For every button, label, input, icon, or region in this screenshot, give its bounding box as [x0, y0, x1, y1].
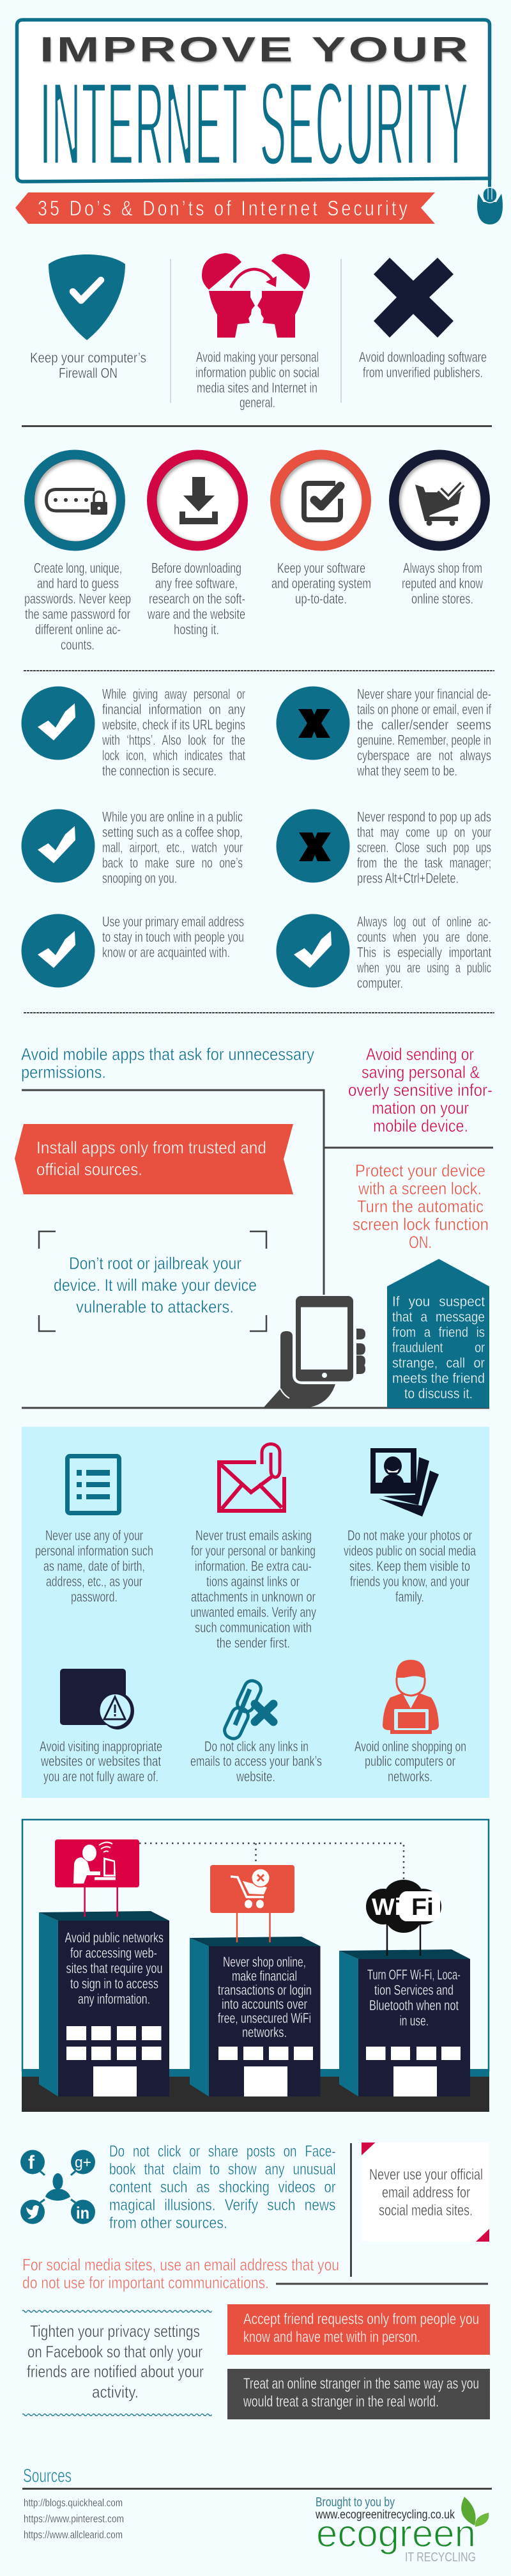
text: pop up ads: press Alt+Ctrl+Delete. [357, 870, 459, 886]
text: up-to-date: and operating system [271, 575, 371, 591]
text: separate email [22, 2255, 339, 2292]
text: unnecessary permissions [21, 1045, 314, 1082]
title: improve your: IMPROVE YOUR [40, 29, 471, 69]
text: https: the connection is secure. [102, 763, 217, 779]
text: https: lock icon, which indicates that [102, 747, 245, 763]
connector dotted lines [139, 1843, 404, 1880]
icon: warning window [60, 1669, 134, 1729]
icon: check badge 3 [22, 914, 95, 987]
icon: broken link with x [222, 1678, 273, 1741]
text: privacy settings: friends are notified about your [27, 2362, 204, 2381]
text: separate email: do not use for important communications. [22, 2273, 269, 2292]
text: facebook posts: book that claim to show any unusual [109, 2160, 336, 2178]
building 1: any information. [78, 1991, 150, 2007]
text: privacy settings: activity. [92, 2382, 139, 2401]
icon: hand holding phone [264, 1295, 365, 1407]
callout: suspicious message: from a friend is [392, 1324, 485, 1340]
text: trust emails: Never trust emails asking [195, 1527, 312, 1543]
text: sensitive information: Avoid sending or [366, 1045, 474, 1064]
text: trust emails: the sender first. [217, 1635, 290, 1651]
text: personal info password: as name, date of birth, [43, 1558, 145, 1574]
text: screen lock: Turn the automatic [357, 1197, 484, 1216]
banner: trusted sources: official sources. [36, 1160, 142, 1179]
text: personal information [195, 349, 319, 410]
text: links in emails: emails to access your bank’s [190, 1753, 322, 1769]
icon: social network cluster: in [76, 2203, 89, 2222]
sources list [24, 2497, 124, 2541]
icon: email with paperclip [219, 1444, 284, 1511]
building 3: Bluetooth when not [369, 1997, 459, 2013]
text: firewall [30, 350, 146, 381]
building 1: Avoid public networks [65, 1930, 164, 1946]
icon: update checkbox ring [270, 450, 371, 551]
text: sensitive information: saving personal & [362, 1063, 480, 1082]
building 2: into accounts over [222, 1996, 307, 2012]
text: log out: computer. [357, 975, 403, 991]
text: firewall: Keep your computer’s [30, 350, 146, 366]
text: screen lock: with a screen lock. [358, 1179, 482, 1198]
text: public setting: back to make sure no one’s [102, 855, 243, 871]
icon: shopping cart ring [389, 450, 490, 551]
text: passwords: different online ac- [35, 621, 121, 637]
text: trust emails: tions against links or [206, 1573, 300, 1589]
text: public computers: Avoid online shopping on [355, 1738, 466, 1754]
text: sensitive information: overly sensitive infor- [348, 1081, 492, 1100]
text: public setting [102, 809, 243, 886]
building 2: free, unsecured WiFi [218, 2010, 311, 2026]
text: passwords [24, 560, 131, 653]
text: privacy settings: on Facebook so that only your [27, 2342, 202, 2361]
text: up-to-date: up-to-date. [295, 591, 347, 607]
text: trust emails: attachments in unknown or [191, 1589, 316, 1605]
sign: public networks [55, 1839, 139, 1917]
icon: mouse [477, 187, 503, 224]
sign: wifi cloud: Fi [411, 1894, 434, 1920]
text: https: financial information on any [102, 701, 245, 717]
callout: suspicious message: If you suspect [392, 1293, 485, 1309]
text: facebook posts: magical illusions. Verify such news [109, 2196, 336, 2214]
sources list: https://www.allclearid.com [24, 2529, 123, 2541]
text: inappropriate websites: Avoid visiting inappropriate [40, 1738, 162, 1754]
box: friend requests: know and have met with in person. [243, 2329, 420, 2346]
text: photos and videos [344, 1527, 477, 1605]
building 1: sites that require you [66, 1960, 162, 1976]
card: official email: social media sites. [379, 2202, 473, 2219]
icon: check badge 2 [22, 809, 95, 882]
callout: suspicious message: that a message [392, 1309, 485, 1325]
brand credit: IT RECYCLING [405, 2550, 476, 2564]
text: screen lock: ON. [409, 1233, 432, 1252]
building 1: for accessing web- [70, 1945, 157, 1961]
text: primary email: know or are acquainted with. [102, 944, 230, 960]
text: shop reputed: online stores. [411, 591, 473, 607]
text: passwords: passwords. Never keep [24, 591, 131, 607]
brand credit [315, 2495, 489, 2564]
heading: sources: Sources [23, 2465, 72, 2486]
box: online stranger [227, 2369, 490, 2419]
text: photos and videos: family. [395, 1589, 424, 1605]
brand credit: ecogreen [316, 2512, 476, 2555]
card: official email: email address for [382, 2184, 470, 2201]
text: personal information: Avoid making your personal [196, 349, 319, 365]
text: personal information: information public on social [195, 364, 319, 380]
text: free software [147, 560, 245, 637]
building 2 [190, 1937, 321, 2096]
text: https: While giving away personal or [102, 686, 245, 702]
text: facebook posts: content such as shocking videos or [109, 2178, 336, 2196]
text: public setting: snooping on you. [102, 870, 177, 886]
icon: social network cluster: f [28, 2152, 35, 2173]
icon: large X [374, 258, 454, 338]
text: links in emails [190, 1738, 322, 1784]
title frame with cable [17, 20, 489, 191]
building 1 [39, 1911, 169, 2096]
text: personal info password [35, 1527, 153, 1605]
text: free software: any free software, [155, 575, 238, 591]
text: https: with ‘https’. Also look for the [102, 732, 245, 748]
building 2: transactions or login [218, 1982, 312, 1998]
sign: wifi cloud: Wi [372, 1894, 401, 1920]
text: trust emails [190, 1527, 316, 1651]
brand credit: www.ecogreenitrecycling.co.uk [315, 2508, 455, 2522]
icon: two heads sharing [202, 253, 310, 338]
text: free software: hosting it. [174, 621, 219, 637]
callout: suspicious message [387, 1259, 489, 1408]
text: personal info password: personal information such [35, 1543, 153, 1559]
callout: root or jailbreak: Don’t root or jailbreak your [69, 1254, 241, 1273]
callout: suspicious message: meets the friend [392, 1370, 485, 1386]
text: passwords: Create long, unique, [34, 560, 122, 576]
text: inappropriate websites: you are not fully aware of. [43, 1768, 158, 1784]
text: trust emails: information. Be extra cau- [195, 1558, 312, 1574]
building 2: networks. [242, 2024, 287, 2040]
text: free software: ware and the website [147, 606, 245, 622]
icon: download ring [147, 450, 248, 551]
banner: trusted sources: Install apps only from trusted and [36, 1138, 266, 1157]
text: inappropriate websites [40, 1738, 162, 1784]
panel: safe practices [22, 1427, 489, 1798]
text: screen lock: screen lock function [353, 1215, 489, 1234]
text: inappropriate websites: websites or websites that [40, 1753, 161, 1769]
text: personal information: media sites and Internet in [197, 380, 317, 396]
building 2: make financial [232, 1968, 297, 1984]
sign: wifi cloud [366, 1880, 441, 1956]
text: passwords: counts. [61, 637, 95, 653]
text: public computers: public computers or [365, 1753, 455, 1769]
text: primary email [102, 914, 244, 960]
text: personal information: general. [240, 394, 275, 410]
icon: shield with check [49, 254, 125, 340]
text: firewall: Firewall ON [59, 365, 118, 381]
text: https: website, check if its URL begins [102, 717, 245, 733]
text: links in emails: Do not click any links in [204, 1738, 309, 1754]
text: screen lock [353, 1161, 489, 1252]
brand credit: Brought to you by [316, 2495, 395, 2510]
icon: social network cluster: g+ [75, 2154, 91, 2171]
text: shop reputed: reputed and know [402, 575, 483, 591]
text: facebook posts [109, 2143, 336, 2232]
text: passwords: the same password for [25, 606, 130, 622]
text: unnecessary permissions: Avoid mobile apps that ask for unnecessary [21, 1045, 314, 1064]
box: friend requests [227, 2304, 490, 2355]
icon: cross badge 1 [276, 687, 350, 760]
panel: buildings frame and ground [22, 1820, 489, 2112]
text: screen lock: Protect your device [355, 1161, 485, 1180]
callout: root or jailbreak [39, 1231, 266, 1331]
text: public setting: mall, airport, etc., watch your [102, 839, 243, 855]
subtitle ribbon [15, 192, 435, 224]
text: facebook posts: from other sources. [109, 2214, 227, 2232]
icon: person at laptop [383, 1660, 439, 1734]
text: pop up ads [357, 809, 491, 886]
text: links in emails: website. [236, 1768, 275, 1784]
text: free software: Before downloading [151, 560, 241, 576]
subtitle ribbon: 35 Do’s & Don’ts of Internet Security [38, 196, 410, 220]
building 2: Never shop online, [223, 1954, 306, 1970]
box: online stranger: would treat a stranger in the real world. [243, 2393, 439, 2410]
callout: suspicious message: fraudulent or [392, 1339, 485, 1355]
building 1: to sign in to access [70, 1976, 158, 1992]
building 3: in use. [400, 2013, 429, 2029]
text: unnecessary permissions: permissions. [21, 1063, 106, 1082]
callout: suspicious message: strange, call or [392, 1355, 485, 1371]
text: public setting: setting such as a coffee shop, [102, 824, 243, 840]
text: shop reputed: Always shop from [403, 560, 482, 576]
sources list: https://www.pinterest.com [24, 2513, 124, 2525]
card: official email [362, 2143, 489, 2242]
text: up-to-date: Keep your software [277, 560, 365, 576]
text: passwords: and hard to guess [37, 575, 119, 591]
text: financial details: what they seem to be. [356, 763, 457, 779]
text: separate email: For social media sites, use an email address that you [22, 2255, 339, 2274]
text: public computers [355, 1738, 466, 1784]
text: trust emails: for your personal or banking [191, 1543, 316, 1559]
icon: list document [68, 1456, 119, 1513]
text: public setting: While you are online in a public [102, 809, 243, 825]
text: primary email: to stay in touch with people you [102, 929, 244, 945]
text: trust emails: such communication with [195, 1620, 312, 1635]
building 3 [339, 1949, 470, 2096]
text: sensitive information: mobile device. [373, 1116, 468, 1136]
text: personal info password: Never use any of your [45, 1527, 143, 1543]
text: https [102, 686, 245, 779]
building 3: tion Services and [374, 1982, 454, 1998]
banner: trusted sources [15, 1124, 293, 1194]
text: sensitive information: mation on your [372, 1098, 469, 1118]
text: privacy settings: Tighten your privacy settings [30, 2322, 200, 2341]
text: shop reputed [402, 560, 483, 607]
text: trust emails: unwanted emails. Verify any [190, 1604, 316, 1620]
icon: photo stack [370, 1448, 439, 1517]
text: privacy settings [27, 2322, 204, 2401]
callout: root or jailbreak: device. It will make your device [54, 1276, 257, 1295]
text: free software: research on the soft- [149, 591, 245, 607]
icon: check badge 4 [276, 914, 350, 987]
text: log out [356, 914, 491, 991]
callout: suspicious message: to discuss it. [404, 1386, 473, 1401]
icon: check badge 1 [22, 687, 95, 760]
sources list: http://blogs.quickheal.com [24, 2497, 123, 2509]
text: photos and videos: sites. Keep them visible to [349, 1558, 470, 1574]
text: financial details [356, 686, 492, 779]
text: unverified publishers [359, 349, 487, 380]
callout: root or jailbreak: vulnerable to attackers. [76, 1297, 234, 1316]
text: public computers: networks. [388, 1768, 432, 1784]
mobile section frame lines [22, 1090, 493, 1408]
text: primary email: Use your primary email address [102, 914, 244, 930]
building 3: Turn OFF Wi-Fi, Loca- [367, 1967, 461, 1983]
text: facebook posts: Do not click or share posts on Face- [109, 2143, 336, 2160]
icon: password ring [24, 450, 125, 551]
sign: shop cart [210, 1865, 294, 1942]
text: sensitive information [348, 1045, 492, 1136]
text: personal info password: address, etc., as your [46, 1573, 142, 1589]
text: up-to-date [271, 560, 371, 607]
icon: cross badge 2 [276, 809, 350, 882]
text: personal info password: password. [71, 1589, 118, 1605]
icon: social network cluster [20, 2150, 95, 2224]
